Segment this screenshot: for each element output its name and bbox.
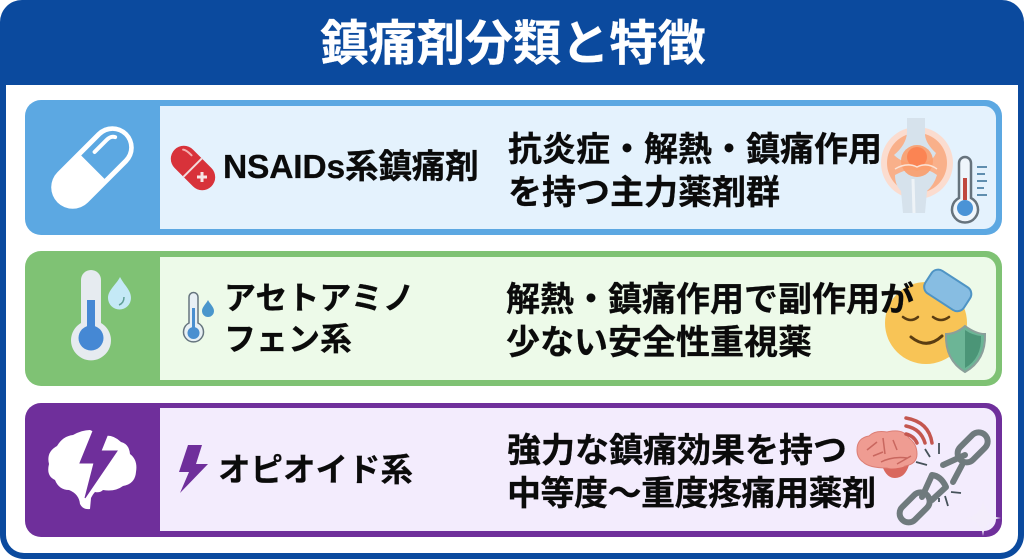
- panel content area: [160, 257, 996, 380]
- icon: calm face with ice pack and shield: [885, 268, 986, 373]
- description: opioid: [507, 432, 876, 513]
- icon: red capsule: [170, 146, 216, 190]
- panel: acetaminophen: [25, 251, 1002, 386]
- label: opioid: オピオイド系: [218, 452, 413, 488]
- icon: purple lightning bolt: [179, 445, 208, 493]
- icon: white brain with lightning bolt: [48, 430, 136, 510]
- description: NSAIDs: 抗炎症・解熱・鎮痛作用: [508, 131, 882, 169]
- panel: NSAIDs: [25, 100, 1002, 235]
- label: acetaminophen: アセトアミノ: [224, 280, 415, 316]
- decorative sparkle mark: [982, 517, 1001, 536]
- description: NSAIDs: [508, 131, 882, 212]
- description: acetaminophen: 解熱・鎮痛作用で副作用が: [506, 281, 914, 319]
- icon: small thermometer with drop: [182, 292, 214, 343]
- label: acetaminophen: フェン系: [224, 321, 352, 357]
- description: opioid: 中等度～重度疼痛用薬剤: [507, 475, 876, 513]
- icon: white thermometer with drop: [71, 270, 131, 360]
- icon: inflamed knee: [881, 118, 953, 213]
- description: opioid: 強力な鎮痛効果を持つ: [507, 432, 847, 470]
- panel background: [25, 100, 1002, 235]
- panel background: [25, 403, 1002, 537]
- panel content area: [160, 408, 996, 531]
- icon: brain with signal waves: [856, 416, 934, 478]
- panel background: [25, 251, 1002, 386]
- icon: thermometer: [950, 156, 987, 224]
- label: NSAIDs: NSAIDs系鎮痛剤: [223, 149, 478, 186]
- icon: broken chain: [896, 429, 991, 526]
- panel content area: [160, 106, 996, 229]
- description: acetaminophen: [506, 281, 914, 362]
- panel: opioid: [25, 403, 1002, 537]
- description: NSAIDs: を持つ主力薬剤群: [508, 174, 780, 212]
- icon: white capsule: [51, 126, 134, 209]
- title: 鎮痛剤分類と特徴: [320, 17, 706, 71]
- label: acetaminophen: [224, 280, 415, 357]
- description: acetaminophen: 少ない安全性重視薬: [506, 324, 812, 362]
